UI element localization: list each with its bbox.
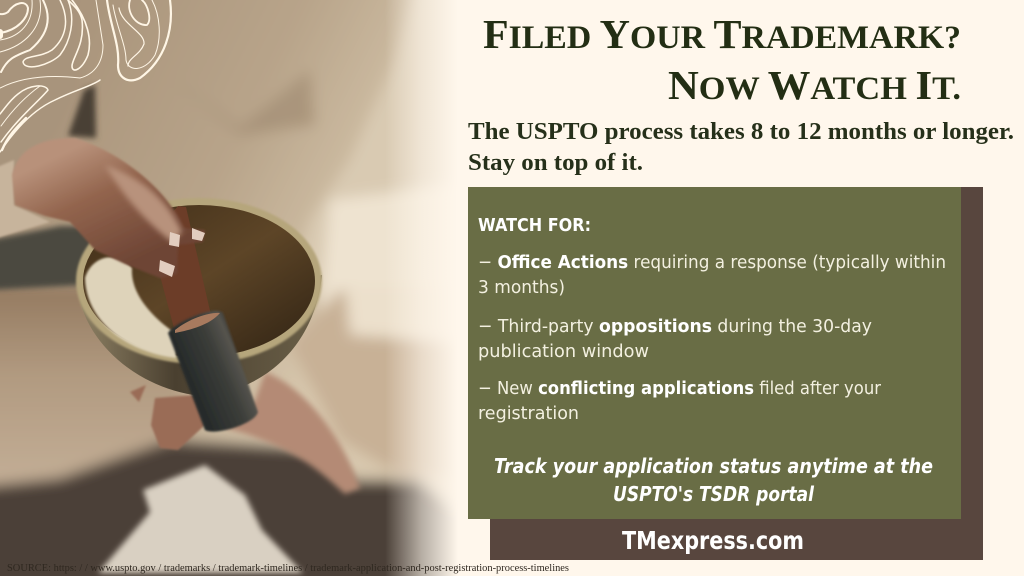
fingers under the bowl bbox=[130, 385, 205, 450]
foot bbox=[225, 372, 360, 494]
item: office actions bbox=[478, 252, 946, 298]
decorative swirl lines bbox=[0, 0, 171, 152]
item: conflicting applications bbox=[478, 378, 882, 424]
floor light patch bbox=[98, 465, 303, 573]
blurred background of sweater, legs and floor bbox=[0, 0, 453, 545]
callout: track status: USPTO's TSDR portal bbox=[613, 482, 815, 506]
item: office actions: − Office Actions requiring a response (typically within bbox=[478, 252, 946, 273]
item: conflicting applications: − New conflicting applications filed after your bbox=[478, 378, 882, 399]
title bbox=[483, 11, 961, 108]
subtitle: The USPTO process takes 8 to 12 months or longer. bbox=[468, 119, 1014, 145]
subtitle: Stay on top of it. bbox=[468, 150, 643, 176]
mallet handle bbox=[160, 206, 210, 328]
item: office actions: 3 months) bbox=[478, 277, 565, 298]
brown backing panel bbox=[490, 187, 983, 560]
bowl bbox=[76, 198, 322, 396]
title: NOW WATCH IT. bbox=[668, 62, 961, 108]
mallet felt head bbox=[168, 311, 258, 432]
item: conflicting applications: registration bbox=[478, 403, 579, 424]
hand bbox=[12, 138, 205, 278]
callout: track status bbox=[494, 454, 933, 506]
dark gap by the arm bbox=[68, 85, 96, 138]
lower left shadow bbox=[0, 226, 100, 290]
subtitle bbox=[468, 119, 1014, 176]
unblurred photo base bbox=[0, 0, 460, 576]
photo: hands holding a singing bowl bbox=[0, 0, 490, 576]
title: FILED YOUR TRADEMARK? bbox=[483, 11, 961, 57]
sleeve cuff bbox=[0, 160, 50, 240]
panel: watch for bbox=[468, 187, 961, 519]
item: oppositions: − Third-party oppositions during the 30-day bbox=[478, 316, 872, 337]
item: oppositions bbox=[478, 316, 872, 362]
callout: track status: Track your application status anytime at the bbox=[494, 454, 933, 478]
source line: SOURCE: https: / / www.uspto.gov / trademarks / trademark-timelines / trademark-application-and-post-registration-process-timelines bbox=[7, 563, 569, 574]
item: oppositions: publication window bbox=[478, 341, 649, 362]
right edge fade bbox=[385, 0, 460, 576]
floor bottom edge bbox=[0, 566, 447, 576]
website: TMexpress.com bbox=[622, 526, 804, 555]
heading: watch for: WATCH FOR: bbox=[478, 215, 591, 236]
